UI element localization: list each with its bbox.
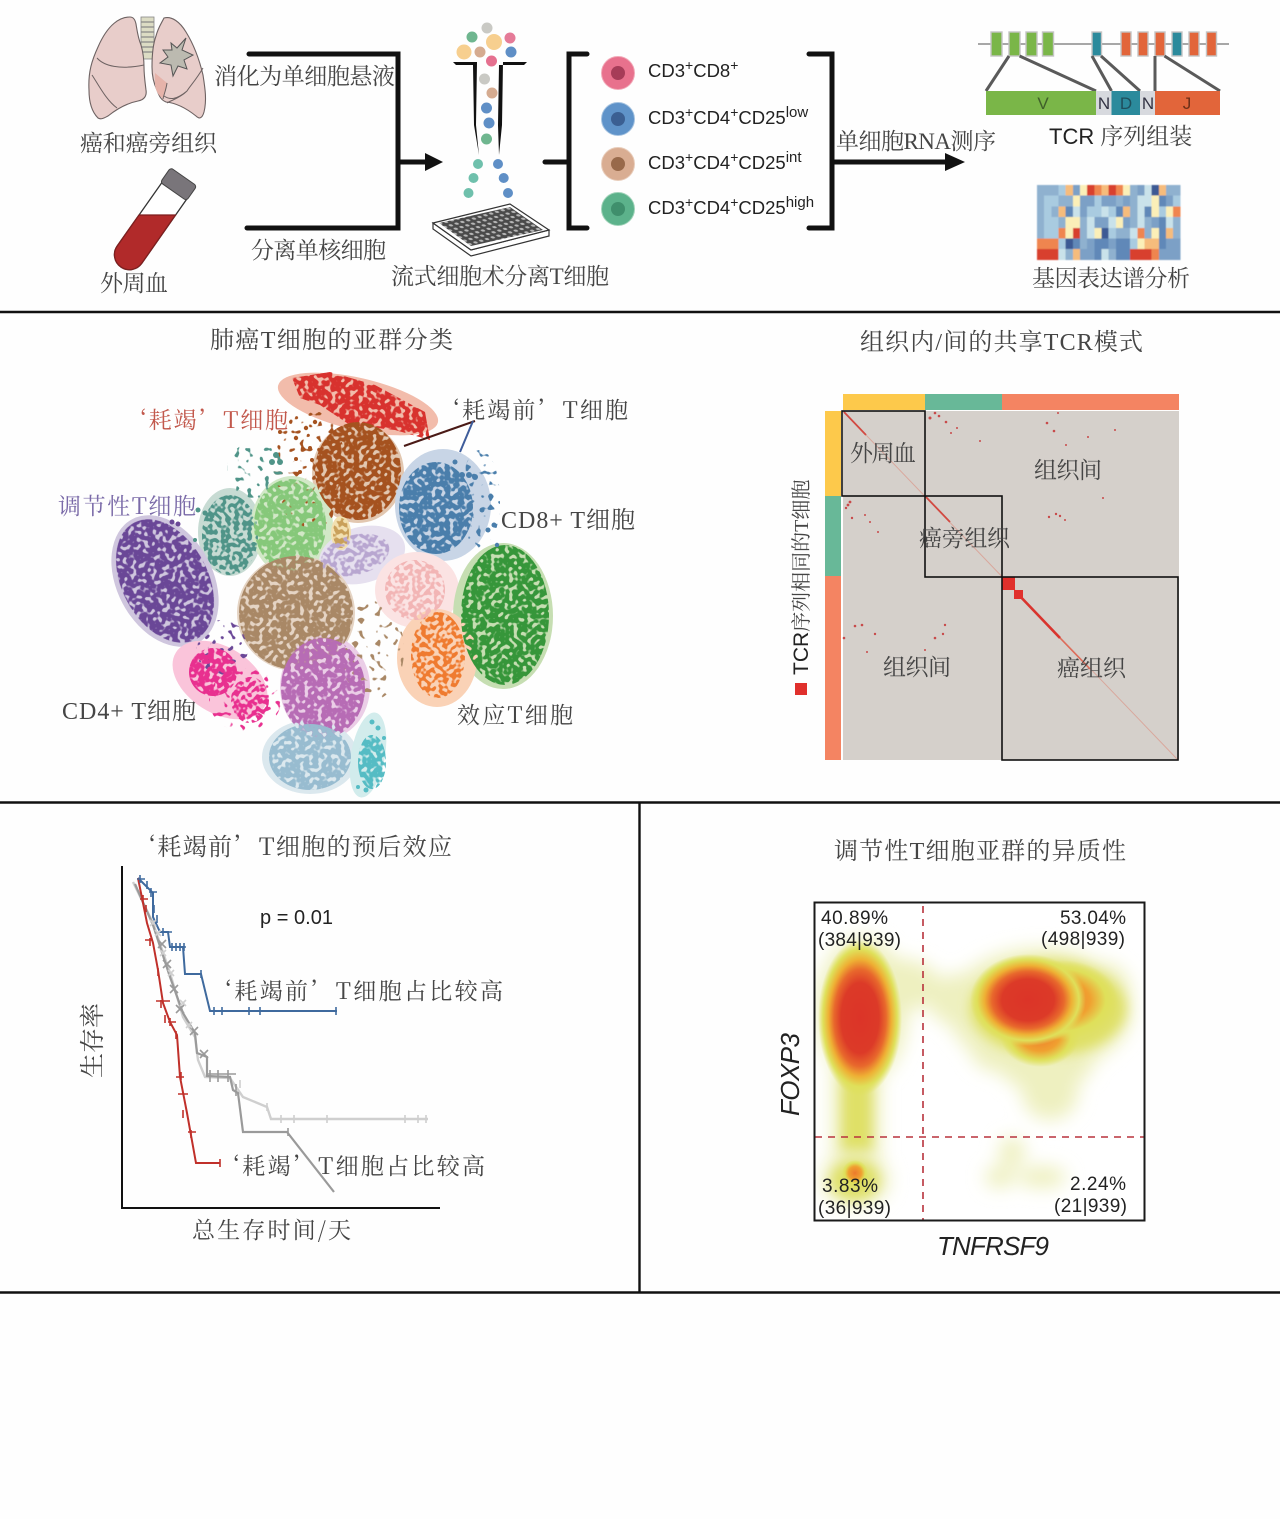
axis label: TNFRSF9: TNFRSF9 bbox=[937, 1231, 1049, 1261]
sparse stray clouds bbox=[196, 410, 500, 732]
icon: well plate bbox=[433, 204, 549, 256]
label: CD3+CD4+CD25low: CD25 bbox=[738, 107, 786, 128]
label: lower left: (36|939) bbox=[818, 1198, 891, 1219]
gates bbox=[815, 906, 1144, 1220]
diagram: TCR locus bbox=[978, 32, 1229, 115]
label: CD8: CD8+ T细胞 bbox=[501, 507, 635, 534]
diagram: TCR locus: N bbox=[1098, 94, 1110, 113]
diagram: TCR locus: J bbox=[1183, 94, 1191, 113]
label: CD3+CD4+CD25high: high bbox=[786, 194, 814, 211]
cluster dots bbox=[96, 372, 549, 790]
label: upper left bbox=[818, 908, 901, 951]
block outlines bbox=[842, 411, 1178, 760]
axes bbox=[122, 866, 440, 1208]
label: isolate monocytes: 分离单核细胞 bbox=[251, 238, 386, 263]
label: p value: p = 0.01 bbox=[260, 907, 333, 929]
connector: digestion and isolation bracket bbox=[247, 54, 443, 228]
chart: TCR sharing matrix bbox=[825, 394, 1179, 760]
label: regulatory: 调节性T细胞 bbox=[58, 488, 196, 521]
label: lower left bbox=[818, 1176, 891, 1219]
cell: CD3+CD8+ bbox=[602, 56, 634, 90]
label: pre-exhausted: ‘耗竭前’T细胞 bbox=[437, 392, 628, 425]
label: tumour block: 癌组织 bbox=[1057, 656, 1127, 681]
label: tumour tissue: 癌和癌旁组织 bbox=[80, 131, 218, 156]
diagram: TCR locus: N bbox=[1142, 94, 1154, 113]
shared clones bbox=[843, 412, 1116, 653]
axis label: FOXP3: FOXP3 bbox=[775, 1032, 805, 1116]
top category bar bbox=[843, 394, 1179, 410]
chart: t-SNE clusters bbox=[90, 360, 553, 800]
label: CD3+CD4+CD25high: CD3 bbox=[648, 197, 685, 218]
label: lower right: 2.24% bbox=[1070, 1174, 1126, 1195]
label: TCR assembly: TCR 序列组装 bbox=[1049, 124, 1192, 149]
stray cells bbox=[164, 420, 499, 792]
label: upper right bbox=[1041, 908, 1126, 950]
bracket: sorted populations bbox=[545, 54, 587, 228]
label: inter-tissue upper: 组织间 bbox=[1034, 458, 1102, 483]
icon: blood tube bbox=[114, 168, 197, 270]
label: CD3+CD4+CD25high: CD4 bbox=[693, 197, 730, 218]
label: CD4: CD4+ T细胞 bbox=[62, 698, 196, 725]
label: CD3+CD4+CD25int: CD4 bbox=[693, 152, 730, 173]
density field bbox=[816, 936, 1132, 1207]
label: CD3+CD4+CD25int: CD3 bbox=[648, 152, 685, 173]
heading: shared TCR pattern: 组织内/间的共享TCR模式 bbox=[860, 329, 1143, 356]
axis label: overall survival time: 总生存时间/天 bbox=[192, 1212, 351, 1245]
label: CD3+CD4+CD25high: CD25 bbox=[738, 197, 786, 218]
matrix diagonal bbox=[843, 411, 1178, 760]
curve: mid grey bbox=[135, 884, 334, 1192]
label: digestion: 消化为单细胞悬液 bbox=[214, 64, 395, 89]
label: lower right: (21|939) bbox=[1054, 1196, 1127, 1217]
cell: CD25 int bbox=[602, 148, 634, 180]
diagram: TCR locus: D bbox=[1120, 94, 1132, 113]
section dividers bbox=[0, 312, 1280, 1292]
label: CD3+CD4+CD25int: int bbox=[786, 149, 802, 166]
label: upper left: 40.89% bbox=[821, 908, 888, 929]
label: CD3+CD8+: + bbox=[730, 57, 738, 73]
label: high exhausted: ‘耗竭’T细胞占比较高 bbox=[217, 1148, 485, 1181]
label: CD3+CD4+CD25int: + bbox=[730, 149, 738, 165]
label: CD3+CD4+CD25low: CD4 bbox=[693, 107, 730, 128]
label: CD3+CD8+: CD8 bbox=[693, 60, 730, 81]
label: CD3+CD4+CD25low: CD3 bbox=[648, 107, 685, 128]
label: high pre-exhausted: ‘耗竭前’T细胞占比较高 bbox=[209, 973, 503, 1006]
cluster regions bbox=[90, 360, 553, 800]
curve: pre-exhausted bbox=[138, 878, 337, 1011]
label: PBMC block: 外周血 bbox=[850, 441, 916, 466]
label: CD3+CD4+CD25int: + bbox=[685, 149, 693, 165]
label: CD3+CD4+CD25low: + bbox=[730, 104, 738, 120]
label: peripheral blood: 外周血 bbox=[100, 271, 168, 296]
callout: pre-exhausted pointers bbox=[404, 421, 475, 452]
curve: exhausted bbox=[138, 878, 220, 1163]
axis label: survival: 生存率 bbox=[79, 1003, 107, 1078]
label: CD3+CD4+CD25low: low bbox=[786, 104, 808, 121]
label: CD3+CD8+: CD3 bbox=[648, 60, 685, 81]
label: exhausted: ‘耗竭’T细胞 bbox=[124, 402, 288, 435]
diagram: TCR locus: V bbox=[1037, 94, 1049, 113]
icon: flow cytometer nozzle with droplets bbox=[453, 22, 527, 198]
label: lower left: 3.83% bbox=[822, 1176, 878, 1197]
left category bar bbox=[825, 411, 841, 760]
heading: Treg heterogeneity: 调节性T细胞亚群的异质性 bbox=[834, 838, 1126, 865]
curve: light grey bbox=[133, 882, 428, 1119]
legend: identical TCR: TCR序列相同的T细胞 bbox=[790, 480, 813, 675]
label: CD3+CD4+CD25low: + bbox=[685, 104, 693, 120]
label: lower right bbox=[1054, 1174, 1127, 1217]
label: upper left: (384|939) bbox=[818, 930, 901, 951]
label: inter-tissue lower: 组织间 bbox=[883, 655, 951, 680]
label: expression profile: 基因表达谱分析 bbox=[1032, 266, 1190, 291]
chart: FOXP3 vs TNFRSF9 density bbox=[814, 902, 1144, 1220]
cell: CD25 low bbox=[602, 102, 634, 136]
icon: lungs with tumour bbox=[89, 17, 206, 119]
heading: prognostic effect: ‘耗竭前’T细胞的预后效应 bbox=[132, 827, 452, 862]
label: upper right: (498|939) bbox=[1041, 929, 1125, 950]
label: upper right: 53.04% bbox=[1060, 908, 1126, 929]
label: CD3+CD8+: + bbox=[685, 57, 693, 73]
chart: expression heatmap bbox=[1037, 185, 1181, 260]
bracket and arrow: sequencing bbox=[809, 54, 965, 228]
plot frame bbox=[814, 902, 1144, 1220]
label: flow sorting: 流式细胞术分离T细胞 bbox=[391, 264, 609, 289]
label: CD3+CD4+CD25high: + bbox=[685, 194, 693, 210]
label: CD3+CD4+CD25int: CD25 bbox=[738, 152, 786, 173]
censor marks bbox=[137, 875, 426, 1167]
label: scRNA sequencing: 单细胞RNA测序 bbox=[836, 129, 996, 154]
heading: subset clustering: 肺癌T细胞的亚群分类 bbox=[210, 327, 453, 354]
chart: survival curves bbox=[122, 866, 440, 1208]
label: effector: 效应T细胞 bbox=[457, 697, 573, 730]
label: CD3+CD4+CD25high: + bbox=[730, 194, 738, 210]
cell: CD25 high bbox=[602, 192, 634, 226]
label: adjacent block: 癌旁组织 bbox=[919, 526, 1011, 551]
